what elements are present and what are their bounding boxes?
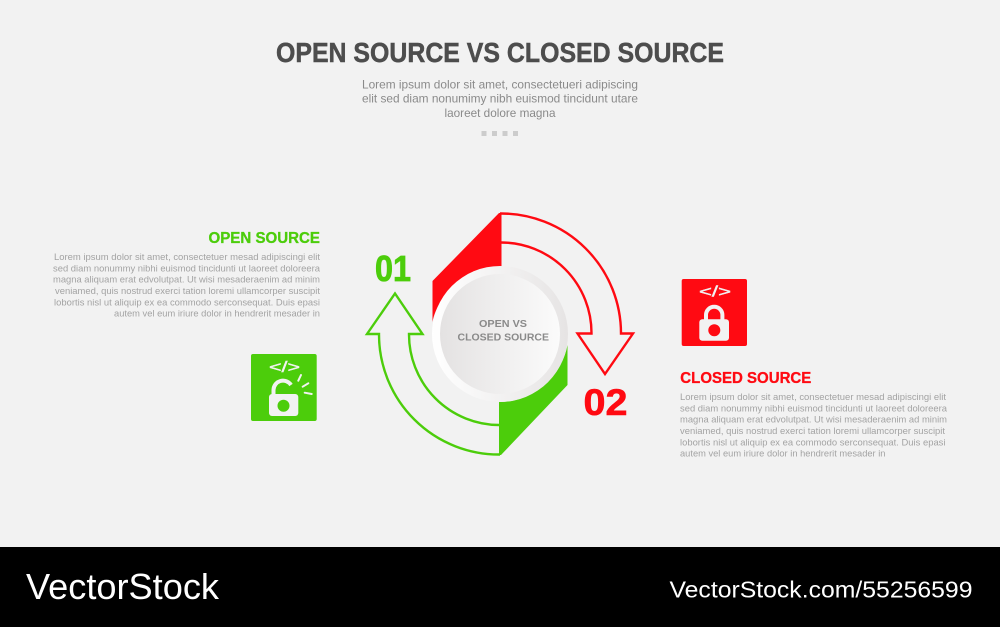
text block: open source: [53, 252, 321, 319]
text block: closed source: sed diam nonummy nibhi euismod tincidunti ut laoreet doloreera: [680, 403, 948, 413]
red arrow: [500, 213, 633, 374]
center label: OPEN VS: [479, 318, 527, 330]
subtitle text: elit sed diam nonumimy nibh euismod tincidunt utare: [362, 92, 638, 106]
text block: open source: veniamed, quis nostrud exerci tation loremi ullamcorper suscipit: [55, 286, 320, 296]
text block: open source: lobortis nisl ut aliquip ex ea commodo serconsequat. Duis epasi: [54, 297, 320, 307]
title dots: [482, 131, 518, 136]
green arrow: [367, 294, 500, 455]
text block: closed source: Lorem ipsum dolor sit amet, consectetuer mesad adipiscingi elit: [680, 392, 946, 402]
text block: open source: Lorem ipsum dolor sit amet, consectetuer mesad adipiscingi elit: [54, 252, 320, 262]
text block: closed source: [680, 392, 948, 459]
text block: closed source: magna aliquam erat edvolutpat. Ut wisi mesaderaenim ad minim: [680, 415, 947, 425]
heading: open source: OPEN SOURCE: [208, 230, 320, 247]
number 01: 01: [375, 248, 411, 289]
circular diagram: [367, 213, 633, 455]
text block: closed source: lobortis nisl ut aliquip ex ea commodo serconsequat. Duis epasi: [680, 437, 946, 447]
text block: open source: autem vel eum iriure dolor in hendrerit mesader in: [114, 309, 320, 319]
subtitle text: Lorem ipsum dolor sit amet, consectetueri adipiscing: [362, 78, 638, 92]
footer bar: [0, 547, 1000, 627]
center label: CLOSED SOURCE: [458, 332, 549, 344]
green corner block: [499, 345, 568, 455]
subtitle text: [362, 78, 638, 120]
title: OPEN SOURCE VS CLOSED SOURCE: [276, 37, 724, 68]
center label: [458, 318, 549, 344]
footer logo: VectorStock: [26, 566, 220, 607]
footer url: VectorStock.com/55256599: [670, 576, 972, 602]
text block: closed source: autem vel eum iriure dolor in hendrerit mesader in: [680, 449, 886, 459]
center disc: [432, 266, 568, 402]
heading: closed source: CLOSED SOURCE: [680, 370, 811, 387]
subtitle text: laoreet dolore magna: [444, 106, 556, 120]
number 02: 02: [584, 382, 628, 423]
text block: open source: magna aliquam erat edvolutpat. Ut wisi mesaderaenim ad minim: [53, 275, 320, 285]
icon: open padlock with code: [251, 354, 317, 421]
icon: closed padlock with code: </>: [699, 284, 731, 300]
icon: closed padlock with code: [682, 279, 747, 346]
red corner block: [432, 213, 502, 322]
text block: closed source: veniamed, quis nostrud exerci tation loremi ullamcorper suscipit: [680, 426, 945, 436]
text block: open source: sed diam nonummy nibhi euismod tincidunti ut laoreet doloreera: [53, 263, 321, 273]
icon: open padlock with code: </>: [269, 359, 300, 376]
